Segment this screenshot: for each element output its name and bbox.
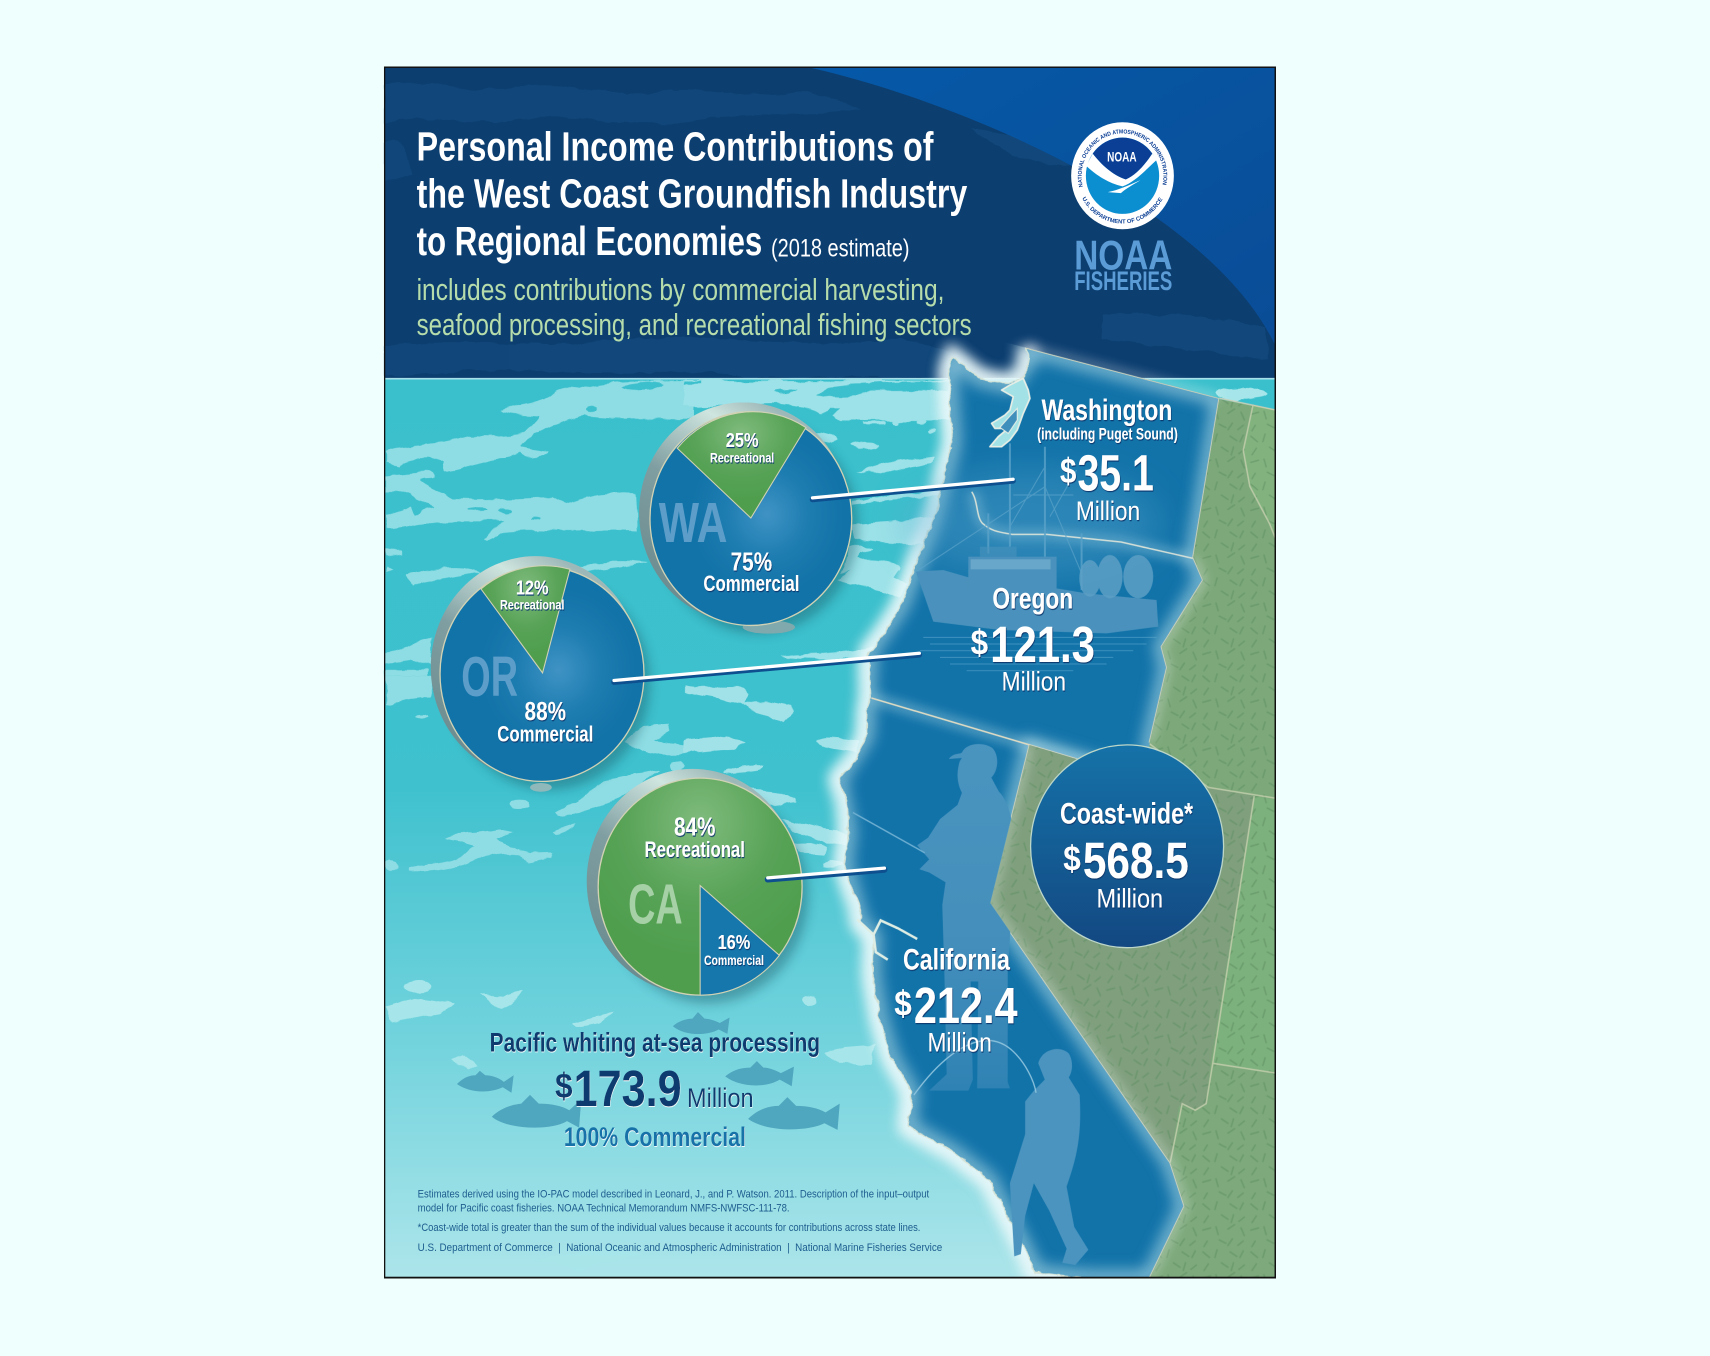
coast-wide total callout: 568.5 [1083,832,1189,889]
California label: 212.4 [914,977,1018,1034]
footnotes [418,1188,942,1254]
Pacific whiting at-sea processing: 173.9 [574,1060,682,1117]
pie chart: Oregon: OR [461,646,518,709]
slice: 12% recreational [481,566,570,673]
connector: California [768,868,884,880]
Pacific whiting at-sea processing: Million [687,1082,754,1113]
pie chart: Washington: Commercial [703,571,799,596]
California label: $ [894,984,912,1023]
map: Washington, Oregon and California [820,336,1222,1277]
title: to Regional Economies [417,218,762,264]
pie chart: Oregon: Commercial [497,722,593,747]
footnotes: *Coast-wide total is greater than the sum of the individual values because it accounts for contributions across state lines. [418,1222,920,1234]
blue corner arc [805,67,1276,347]
subtitle: seafood processing, and recreational fishing sectors [417,308,972,342]
title [417,123,968,264]
pie chart: California: Recreational [645,837,745,862]
pie chart: California: CA [628,874,683,937]
fishing boat silhouette [916,443,1158,671]
map: neighbouring states [990,398,1276,1278]
pie chart: Oregon [431,556,650,792]
Pacific whiting at-sea processing: $ [555,1067,573,1106]
pie chart: Washington: 75% [731,546,772,576]
Washington label: $ [1060,452,1076,491]
Pacific whiting at-sea processing: 100% Commercial [564,1121,746,1152]
California label: California [903,944,1010,977]
Washington label: Washington [1041,394,1172,427]
Oregon label [971,583,1095,696]
pie chart: Washington: 25% [726,429,758,452]
Pacific whiting at-sea processing [490,1026,820,1152]
pie chart: Washington [639,402,1013,634]
Oregon label: $ [971,623,988,662]
pie chart: California: Commercial [704,953,764,969]
Washington label: (including Puget Sound) [1037,425,1178,443]
NOAA logo: NOAA [1107,149,1137,165]
pie chart: Oregon: 88% [525,696,566,726]
California label: Million [928,1026,992,1057]
poster frame [384,67,1276,1278]
subtitle: includes contributions by commercial harvesting, [417,273,944,307]
Washington label: 35.1 [1077,445,1154,502]
slice: 25% recreational [677,412,806,518]
angler silhouette, lower [914,1040,1088,1265]
state borders [871,348,1219,1278]
pie chart: Washington: WA [659,492,727,555]
title: the West Coast Groundfish Industry [417,171,968,217]
pie chart: Oregon: Recreational [500,598,564,614]
fish silhouettes [457,1012,840,1130]
Washington label: Million [1076,495,1140,526]
ocean background [384,380,1276,1278]
title: (2018 estimate) [771,234,910,262]
connector: Oregon [614,653,919,682]
Puget Sound [990,378,1030,447]
footnotes: Estimates derived using the IO-PAC model described in Leonard, J., and P. Watson. 2011. Description of the input–output [418,1188,929,1200]
pie chart: California: 16% [718,931,750,954]
title: Personal Income Contributions of [417,123,934,169]
connector: Washington [812,479,1013,499]
ocean wave highlights [384,378,1268,1070]
California label [894,944,1018,1057]
pie chart: Oregon: 12% [516,576,549,599]
Pacific whiting at-sea processing: Pacific whiting at-sea processing [490,1026,820,1057]
Oregon label: 121.3 [990,616,1095,673]
subtitle [417,273,972,342]
NOAA Fisheries wordmark: NOAA [1074,231,1172,278]
header wave texture [384,83,1271,377]
pie chart: Washington: Recreational [710,450,774,466]
NOAA Fisheries wordmark: FISHERIES [1074,265,1172,296]
footnotes: U.S. Department of Commerce | National Oceanic and Atmospheric Administration | National Marine Fisheries Service [418,1242,942,1254]
NOAA logo [1071,122,1174,230]
San Francisco Bay [857,919,917,960]
coast-wide total callout: Million [1097,882,1163,913]
header band [384,67,1276,380]
slice: 16% commercial [700,886,779,995]
NOAA logo: NATIONAL OCEANIC AND ATMOSPHERIC ADMINISTRATION [1078,129,1168,188]
Oregon label: Oregon [992,583,1073,616]
Washington label [1037,394,1178,526]
NOAA Fisheries wordmark [1076,240,1172,290]
pie chart: California [587,769,808,1003]
NOAA logo: U.S. DEPARTMENT OF COMMERCE [1082,196,1162,224]
infographic poster [384,66,1276,1278]
Oregon label: Million [1002,665,1066,696]
angler silhouette, upper [853,744,1015,1091]
coast-wide total callout [1031,745,1224,948]
coast-wide total callout: Coast-wide* [1060,797,1193,830]
footnotes: model for Pacific coast fisheries. NOAA Technical Memorandum NMFS-NWFSC-111-78. [418,1203,790,1215]
pie chart: California: 84% [674,811,715,841]
coast-wide total callout: $ [1063,839,1081,878]
